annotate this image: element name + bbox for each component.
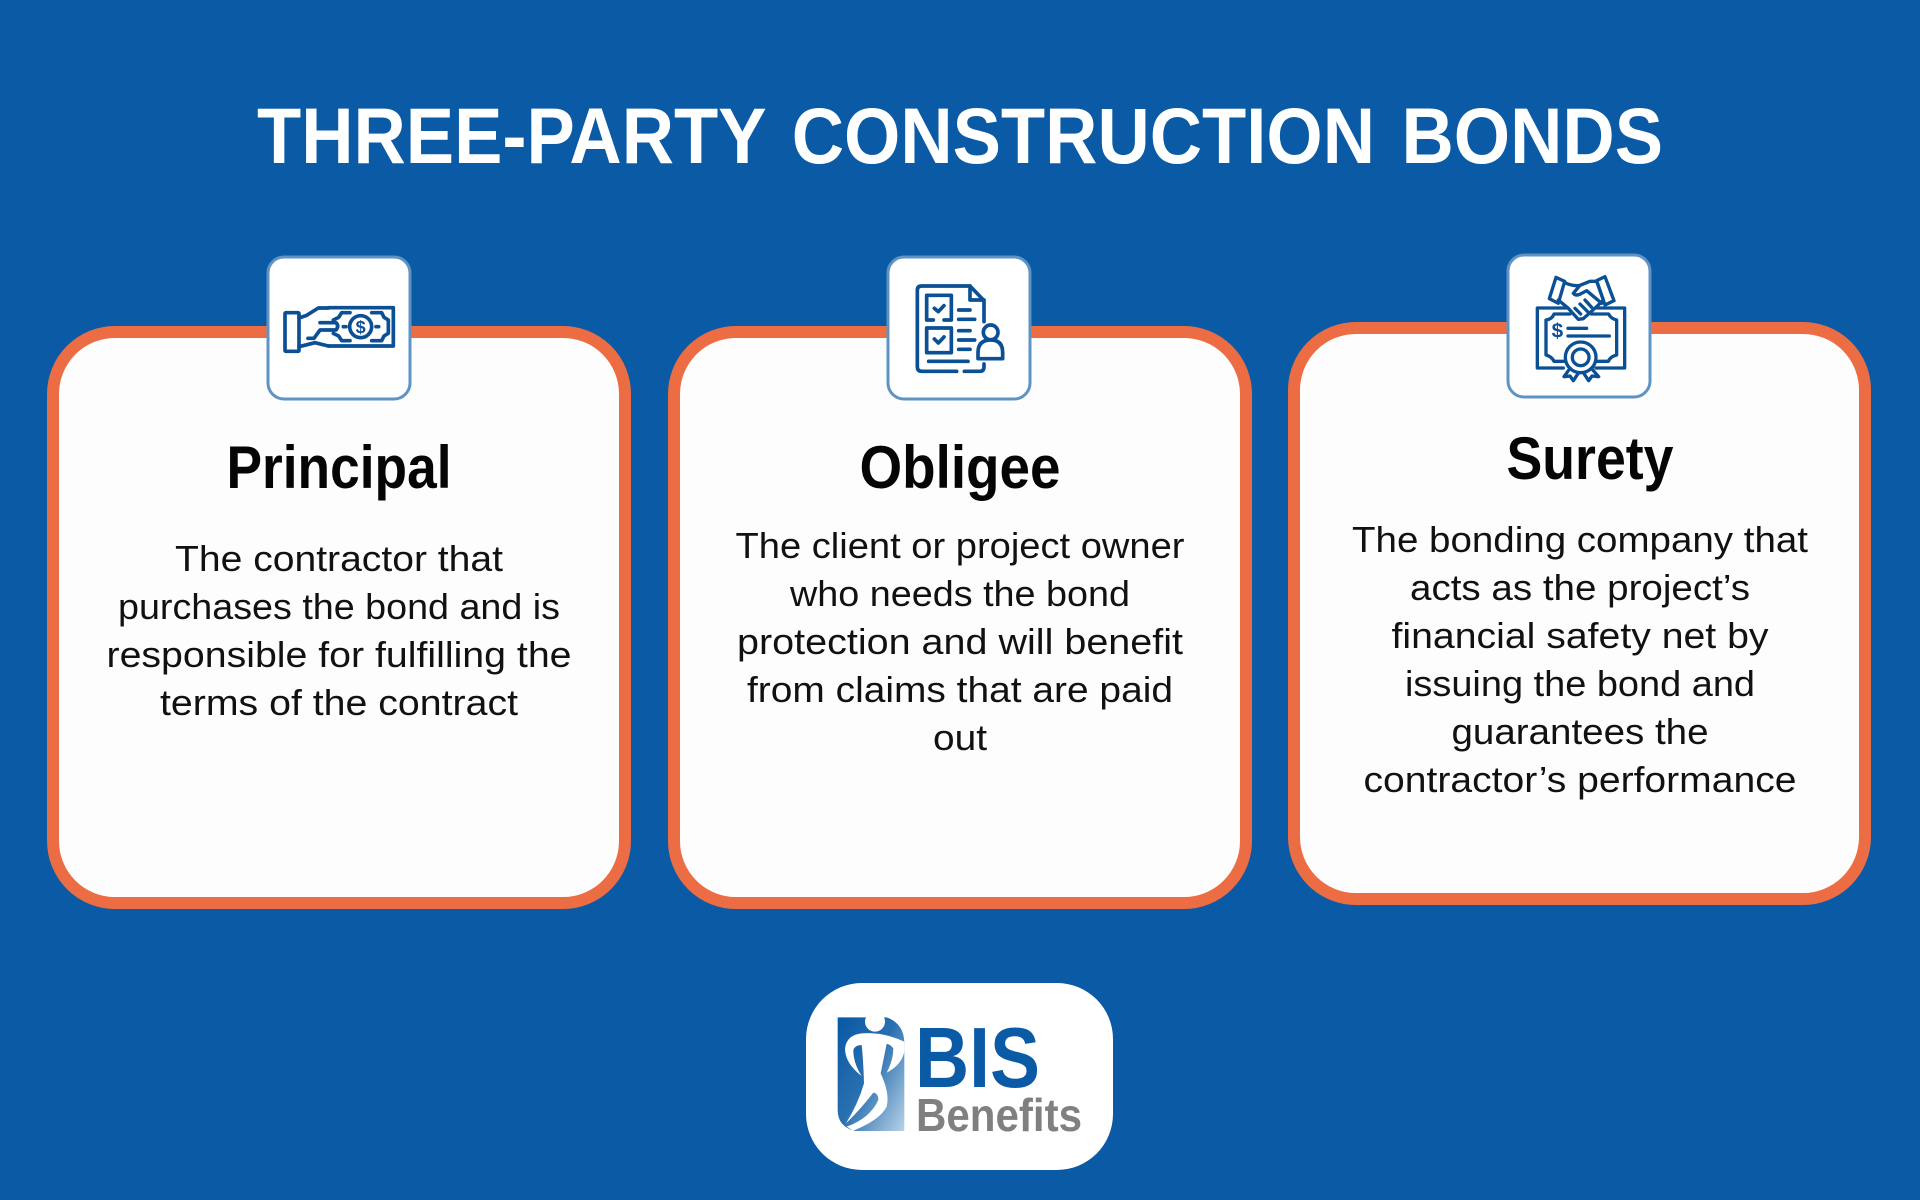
description: out — [933, 717, 987, 758]
description: financial safety net by — [1392, 615, 1768, 656]
logo: BIS Benefits — [806, 983, 1113, 1170]
description: acts as the project’s — [1410, 567, 1750, 608]
title: THREE-PARTY CONSTRUCTION BONDS — [257, 91, 1663, 180]
wordmark: Benefits: Benefits — [916, 1089, 1082, 1141]
description: responsible for fulfilling the — [106, 634, 572, 675]
description: protection and will benefit — [737, 621, 1183, 662]
heading: Surety — [1506, 425, 1674, 492]
description: contractor’s performance — [1364, 759, 1796, 800]
wordmark: BIS: BIS — [915, 1011, 1040, 1106]
description — [736, 525, 1185, 758]
icon: shield with runner — [838, 1012, 904, 1131]
icon: hand holding money — [268, 257, 410, 399]
panel: surety — [1294, 255, 1865, 899]
panel: obligee — [674, 257, 1246, 903]
icon: handshake and certificate: $ — [1552, 319, 1564, 342]
description: The client or project owner — [736, 525, 1185, 566]
description: from claims that are paid — [747, 669, 1173, 710]
description: issuing the bond and — [1405, 663, 1755, 704]
description: guarantees the — [1452, 711, 1708, 752]
icon: checklist and person — [888, 257, 1030, 399]
icon: handshake and certificate — [1508, 255, 1650, 397]
description: purchases the bond and is — [118, 586, 560, 627]
description: terms of the contract — [160, 682, 518, 723]
description — [106, 538, 572, 723]
card frame — [674, 332, 1246, 903]
heading: Principal — [226, 434, 452, 501]
description: who needs the bond — [789, 573, 1130, 614]
card frame — [1294, 328, 1865, 899]
description: The contractor that — [175, 538, 503, 579]
description — [1352, 519, 1808, 800]
panel: principal — [53, 257, 625, 903]
card frame — [53, 332, 625, 903]
icon: hand holding money: $ — [356, 317, 366, 337]
heading: Obligee — [860, 434, 1060, 501]
description: The bonding company that — [1352, 519, 1808, 560]
